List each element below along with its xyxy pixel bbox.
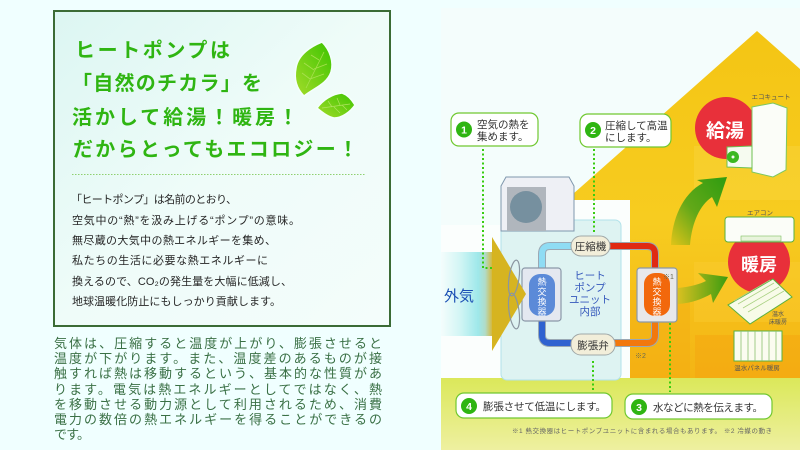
intro text: 私たちの生活に必要な熱エネルギーに <box>72 253 268 267</box>
intro text: 地球温暖化防止にもしっかり貢献します。 <box>72 294 281 308</box>
heating group: 温水パネル暖房 <box>734 363 780 372</box>
unit label: ヒート <box>574 270 606 282</box>
panel: heat pump intro <box>54 11 390 326</box>
house <box>573 31 800 378</box>
right heat exchanger: 熱 <box>652 276 662 287</box>
icon: small leaf <box>317 93 355 118</box>
intro text: 換えるので、CO₂の発生量を大幅に低減し、 <box>72 274 292 288</box>
callout 1: 1 <box>461 124 467 136</box>
compressor <box>571 236 610 256</box>
left heat exchanger: 換 <box>537 296 547 307</box>
intro text: 無尽蔵の大気中の熱エネルギーを集め、 <box>72 233 276 247</box>
callout 4: 膨張させて低温にします。 <box>483 400 606 413</box>
heating group <box>728 231 792 372</box>
note marks <box>635 273 674 360</box>
arrow: to hot water <box>671 177 727 245</box>
left heat exchanger: 器 <box>537 307 547 317</box>
intro text <box>71 192 300 308</box>
right heat exchanger <box>637 268 677 322</box>
footnote: ※1 熱交換器はヒートポンプユニットに含まれる場合もあります。 ※2 冷媒の動き <box>512 426 772 435</box>
text block: explanation: です。 <box>54 427 90 442</box>
outdoor air band <box>441 252 493 336</box>
text block: explanation: を移動させる動力源として利用されるため、消費 <box>54 397 382 412</box>
ground <box>441 378 800 450</box>
right heat exchanger: 換 <box>652 296 662 307</box>
compressor: 圧縮機 <box>575 240 607 253</box>
heading: だからとってもエコロジー！ <box>73 139 358 161</box>
refrigerant loop <box>542 246 655 343</box>
note marks: ※1 <box>663 273 674 281</box>
unit label <box>569 270 611 318</box>
air arrow <box>492 237 526 351</box>
heading: ヒートポンプは <box>75 39 230 62</box>
intro text: 空気中の“熱”を汲み上げる“ポンプ”の意味。 <box>72 213 300 227</box>
panel: heat pump diagram <box>441 8 800 450</box>
text block: explanation: ります。電気は熱エネルギーとしてではなく、熱 <box>54 382 382 397</box>
text block: explanation <box>54 336 382 442</box>
callout 1: 空気の熱を <box>477 118 530 131</box>
left heat exchanger <box>522 268 561 321</box>
label: outside air: 外気 <box>444 288 474 305</box>
unit label: ユニット <box>569 294 611 306</box>
heating group: 温水 <box>772 310 784 318</box>
left heat exchanger: 熱 <box>537 276 547 287</box>
hot water group: エコキュート <box>752 93 790 101</box>
unit label: ポンプ <box>574 282 606 294</box>
expansion valve: 膨張弁 <box>577 339 609 352</box>
text block: explanation: 温度が下がります。また、温度差のあるものが接 <box>54 351 382 366</box>
heat pump unit box <box>501 220 621 380</box>
heading: 活かして給湯！暖房！ <box>72 106 298 129</box>
heating group: 床暖房 <box>769 318 787 326</box>
callout 3: 水などに熱を伝えます。 <box>653 401 763 414</box>
hot water group: 給湯 <box>706 120 744 142</box>
callout 1 <box>451 113 538 146</box>
unit label: 内部 <box>580 305 601 318</box>
hot water group <box>695 93 790 177</box>
callout 2: 2 <box>590 125 596 137</box>
icon: fan <box>507 259 521 330</box>
text block: explanation: 気体は、圧縮すると温度が上がり、膨張させると <box>54 336 382 351</box>
callout 2: 圧縮して高温 <box>605 119 668 132</box>
air conditioner: エアコン <box>747 209 773 217</box>
text block: explanation: 触すれば熱は移動するという、基本的な性質があ <box>54 366 382 381</box>
note marks: ※2 <box>635 352 646 360</box>
heading: 「自然のチカラ」を <box>72 71 262 95</box>
right heat exchanger: 器 <box>652 307 662 317</box>
callout 1: 集めます。 <box>477 130 528 143</box>
callout 3: 3 <box>636 402 642 414</box>
outdoor unit <box>501 177 574 231</box>
callout 2: にします。 <box>605 132 656 144</box>
intro text: 「ヒートポンプ」は名前のとおり、 <box>71 192 237 206</box>
callout 3 <box>625 394 772 419</box>
icon: large leaf <box>295 42 332 96</box>
text block: explanation: 電力の数倍の熱エネルギーを得ることができるの <box>54 412 382 427</box>
air conditioner <box>725 209 794 242</box>
dotted leaders <box>483 149 670 392</box>
callout 4: 4 <box>466 401 472 413</box>
expansion valve <box>571 334 615 355</box>
heating group: 暖房 <box>741 255 777 275</box>
arrow: to heating <box>678 273 728 304</box>
right heat exchanger: 交 <box>652 287 662 297</box>
callout 2 <box>580 114 671 147</box>
left heat exchanger: 交 <box>537 287 547 297</box>
heading <box>72 39 358 161</box>
callout 4 <box>456 393 612 418</box>
